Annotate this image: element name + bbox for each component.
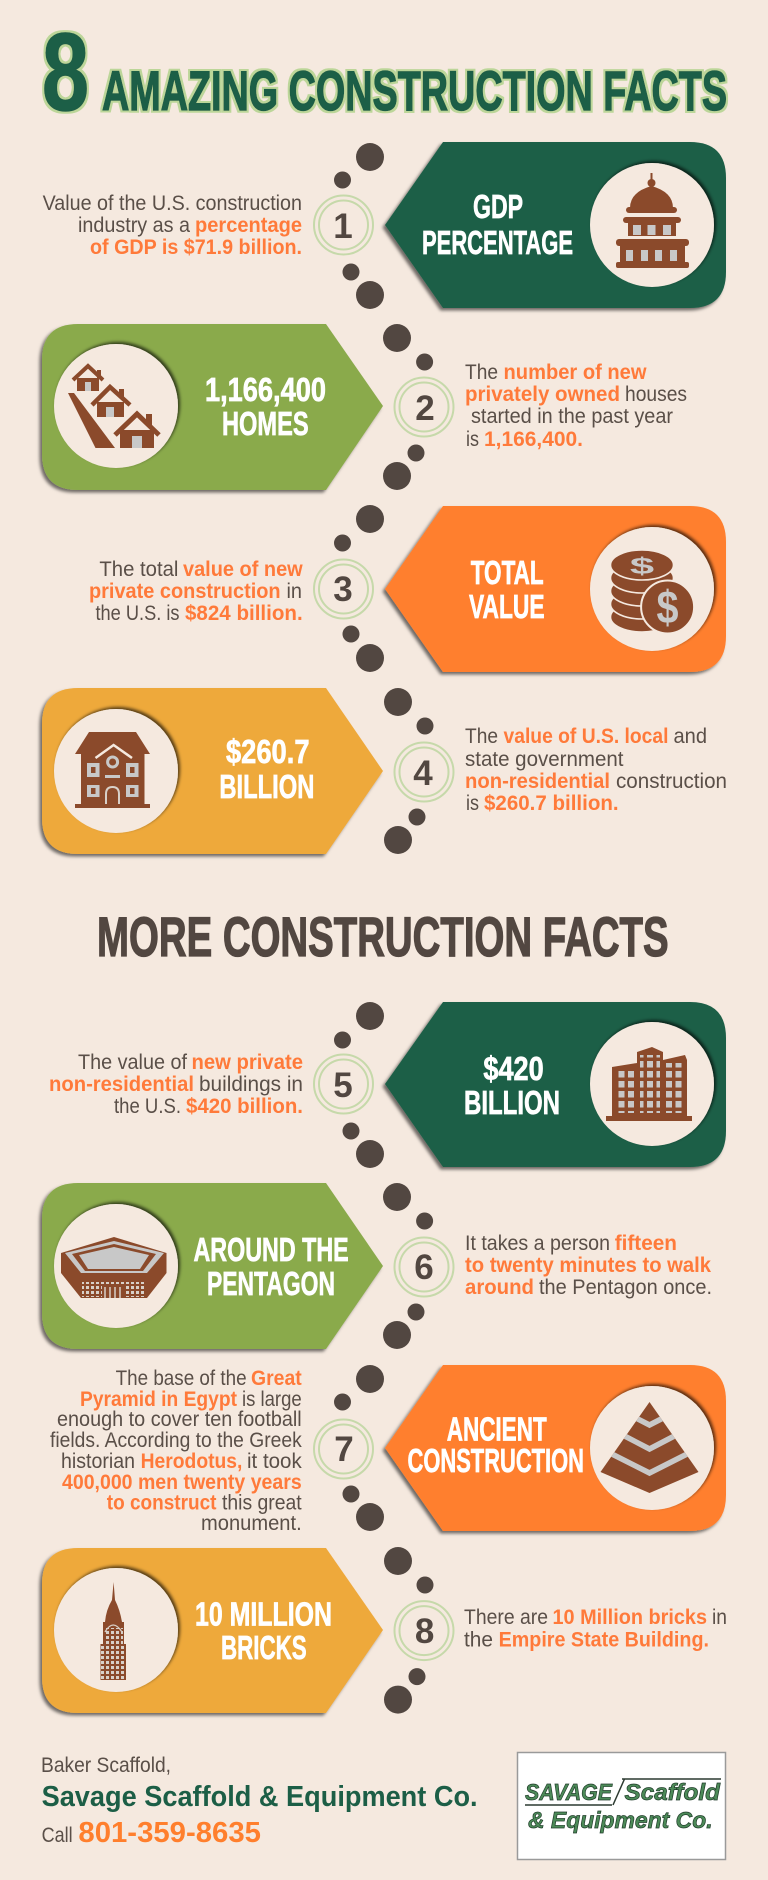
number badge 2 xyxy=(394,378,454,436)
text block 7: Great xyxy=(251,1367,302,1390)
number badge 5 xyxy=(314,1054,373,1114)
fact 4 xyxy=(42,688,727,854)
title xyxy=(42,11,727,134)
text block 1: industry as a xyxy=(78,214,190,237)
text block 7: Herodotus, xyxy=(141,1450,242,1473)
text block 1: percentage xyxy=(195,214,302,237)
text block 7: fields. According to the Greek xyxy=(50,1429,302,1452)
text block 7: is large xyxy=(242,1388,302,1411)
text block 3: value of new xyxy=(183,558,303,581)
text block 8: 10 Million bricks xyxy=(552,1606,707,1629)
text block 2: 1,166,400. xyxy=(484,428,583,451)
text block 8: in xyxy=(712,1606,727,1629)
text block 5 xyxy=(49,1051,303,1118)
fact 5 xyxy=(49,1002,726,1168)
text block 7: Pyramid in Egypt xyxy=(80,1388,237,1411)
number badge 1 xyxy=(314,196,373,254)
panel: around the pentagon: AROUND THE xyxy=(194,1231,349,1268)
text block 2: privately owned xyxy=(465,383,620,406)
text block 8: Empire State Building. xyxy=(499,1628,709,1652)
footer contact xyxy=(41,1754,478,1849)
footer contact: Baker Scaffold, xyxy=(41,1754,171,1777)
fact 1 xyxy=(43,142,726,309)
text block 4 xyxy=(465,725,727,815)
fact 2 xyxy=(42,324,687,490)
title: 8 xyxy=(42,11,89,134)
panel: 10 million bricks xyxy=(42,1548,383,1713)
text block 7: this great xyxy=(222,1492,302,1515)
text block 7: enough to cover ten football xyxy=(57,1408,302,1431)
text block 2 xyxy=(465,361,687,451)
footer contact: Savage Scaffold & Equipment Co. xyxy=(42,1781,478,1813)
fact 8 xyxy=(42,1547,727,1714)
text block 6 xyxy=(465,1232,712,1299)
panel: total value xyxy=(385,506,726,672)
text block 4: is xyxy=(466,792,479,815)
number badge 4 xyxy=(394,742,454,802)
fact 3 xyxy=(89,505,726,672)
text block 5: non-residential xyxy=(49,1073,194,1096)
text block 5: The value of xyxy=(78,1051,187,1074)
text block 2: The xyxy=(465,361,498,384)
panel: 260.7 billion xyxy=(42,688,383,854)
panel: 260.7 billion: BILLION xyxy=(219,768,314,805)
logo: Savage Scaffold: & Equipment Co. xyxy=(528,1807,713,1833)
text block 7: monument. xyxy=(201,1512,302,1535)
fact 6 xyxy=(42,1183,712,1349)
dots 4 xyxy=(384,688,434,854)
panel: homes: HOMES xyxy=(222,405,309,442)
text block 1 xyxy=(43,192,302,259)
text block 7: historian xyxy=(61,1450,135,1473)
panel: ancient construction xyxy=(385,1365,726,1531)
panel: GDP percentage: GDP xyxy=(473,188,523,225)
dots 7 xyxy=(334,1365,384,1531)
number badge 5: 5 xyxy=(333,1066,353,1105)
logo: Savage Scaffold: SAVAGE xyxy=(525,1779,613,1805)
panel: ancient construction: CONSTRUCTION xyxy=(408,1442,584,1479)
icon: pyramid xyxy=(600,1402,699,1493)
text block 6: the Pentagon once. xyxy=(539,1276,712,1299)
text block 7: 400,000 men twenty years xyxy=(62,1471,302,1494)
icon: coins xyxy=(610,550,694,634)
footer contact: 801-359-8635 xyxy=(78,1817,261,1849)
text block 4: non-residential xyxy=(465,770,610,793)
panel: 420 billion xyxy=(385,1002,726,1167)
icon: coins: $ xyxy=(656,581,678,633)
text block 5: $420 billion. xyxy=(186,1095,303,1118)
text block 8: There are xyxy=(464,1606,548,1629)
text block 2: started in the past year xyxy=(471,405,673,428)
text block 6: to twenty minutes to walk xyxy=(465,1254,711,1277)
panel: 420 billion: BILLION xyxy=(464,1084,560,1121)
text block 6: fifteen xyxy=(615,1232,677,1255)
text block 2: houses xyxy=(625,383,687,406)
icon: office towers xyxy=(606,1047,692,1121)
text block 4: construction xyxy=(616,770,727,793)
text block 3 xyxy=(89,558,303,625)
dots 8 xyxy=(384,1547,434,1714)
number badge 3 xyxy=(314,560,373,618)
logo: Savage Scaffold: Scaffold xyxy=(624,1779,721,1805)
panel: total value: VALUE xyxy=(469,588,545,625)
number badge 1: 1 xyxy=(333,207,353,246)
panel: total value: TOTAL xyxy=(471,554,544,591)
text block 7: it took xyxy=(247,1450,302,1473)
text block 7 xyxy=(50,1367,302,1535)
text block 1: Value of the U.S. construction xyxy=(43,192,302,215)
panel: 260.7 billion: $260.7 xyxy=(226,733,310,770)
dots 1 xyxy=(334,143,384,309)
icon: houses xyxy=(68,366,159,448)
panel: 420 billion: $420 xyxy=(483,1050,544,1087)
text block 7: to construct xyxy=(107,1492,216,1515)
text block 4: $260.7 billion. xyxy=(484,792,619,815)
panel: around the pentagon: PENTAGON xyxy=(207,1265,335,1302)
fact 7 xyxy=(50,1365,726,1535)
text block 2: is xyxy=(466,428,479,451)
text block 5: buildings in xyxy=(199,1073,303,1096)
panel: GDP percentage: PERCENTAGE xyxy=(422,224,573,261)
panel: ancient construction: ANCIENT xyxy=(447,1411,547,1448)
dots 3 xyxy=(334,505,384,672)
number badge 8: 8 xyxy=(415,1612,434,1651)
text block 8: the xyxy=(464,1628,493,1652)
panel: homes: 1,166,400 xyxy=(205,371,326,408)
icon: skyscraper xyxy=(100,1582,126,1680)
number badge 6 xyxy=(394,1238,454,1296)
text block 8 xyxy=(464,1606,727,1652)
text block 1: of GDP is $71.9 billion. xyxy=(90,236,302,259)
number badge 8 xyxy=(394,1601,454,1660)
text block 3: in xyxy=(286,580,302,603)
dots 6 xyxy=(383,1183,433,1349)
number badge 2: 2 xyxy=(415,389,435,428)
panel: 10 million bricks: 10 MILLION xyxy=(195,1596,332,1632)
logo: Savage Scaffold xyxy=(518,1752,726,1860)
dots 5 xyxy=(334,1002,384,1168)
text block 2: number of new xyxy=(504,361,647,384)
text block 4: and xyxy=(674,725,707,748)
number badge 7 xyxy=(314,1420,373,1478)
dots 2 xyxy=(383,324,433,490)
text block 5: new private xyxy=(192,1051,303,1074)
text block 4: value of U.S. local xyxy=(504,725,668,748)
number badge 7: 7 xyxy=(334,1430,354,1469)
icon: coins: $ xyxy=(630,554,654,579)
icon: pentagon xyxy=(61,1237,166,1298)
panel: around the pentagon xyxy=(42,1183,383,1349)
number badge 6: 6 xyxy=(414,1248,434,1287)
number badge 3: 3 xyxy=(333,570,353,609)
text block 3: The total xyxy=(99,558,178,581)
text block 3: private construction xyxy=(89,580,281,603)
text block 4: state government xyxy=(465,748,624,771)
text block 3: $824 billion. xyxy=(185,602,303,625)
panel: 10 million bricks: BRICKS xyxy=(221,1629,307,1666)
footer contact: Call xyxy=(42,1824,73,1847)
text block 5: the U.S. xyxy=(114,1095,181,1118)
icon: capitol xyxy=(616,173,689,268)
text block 3: the U.S. is xyxy=(96,602,180,625)
icon: building xyxy=(75,732,150,808)
text block 6: around xyxy=(465,1276,534,1299)
number badge 4: 4 xyxy=(413,754,433,793)
text block 7: The base of the xyxy=(116,1367,247,1390)
text block 4: The xyxy=(465,725,498,748)
panel: homes xyxy=(42,324,383,490)
text block 6: It takes a person xyxy=(465,1232,610,1255)
panel: GDP percentage xyxy=(385,142,726,308)
